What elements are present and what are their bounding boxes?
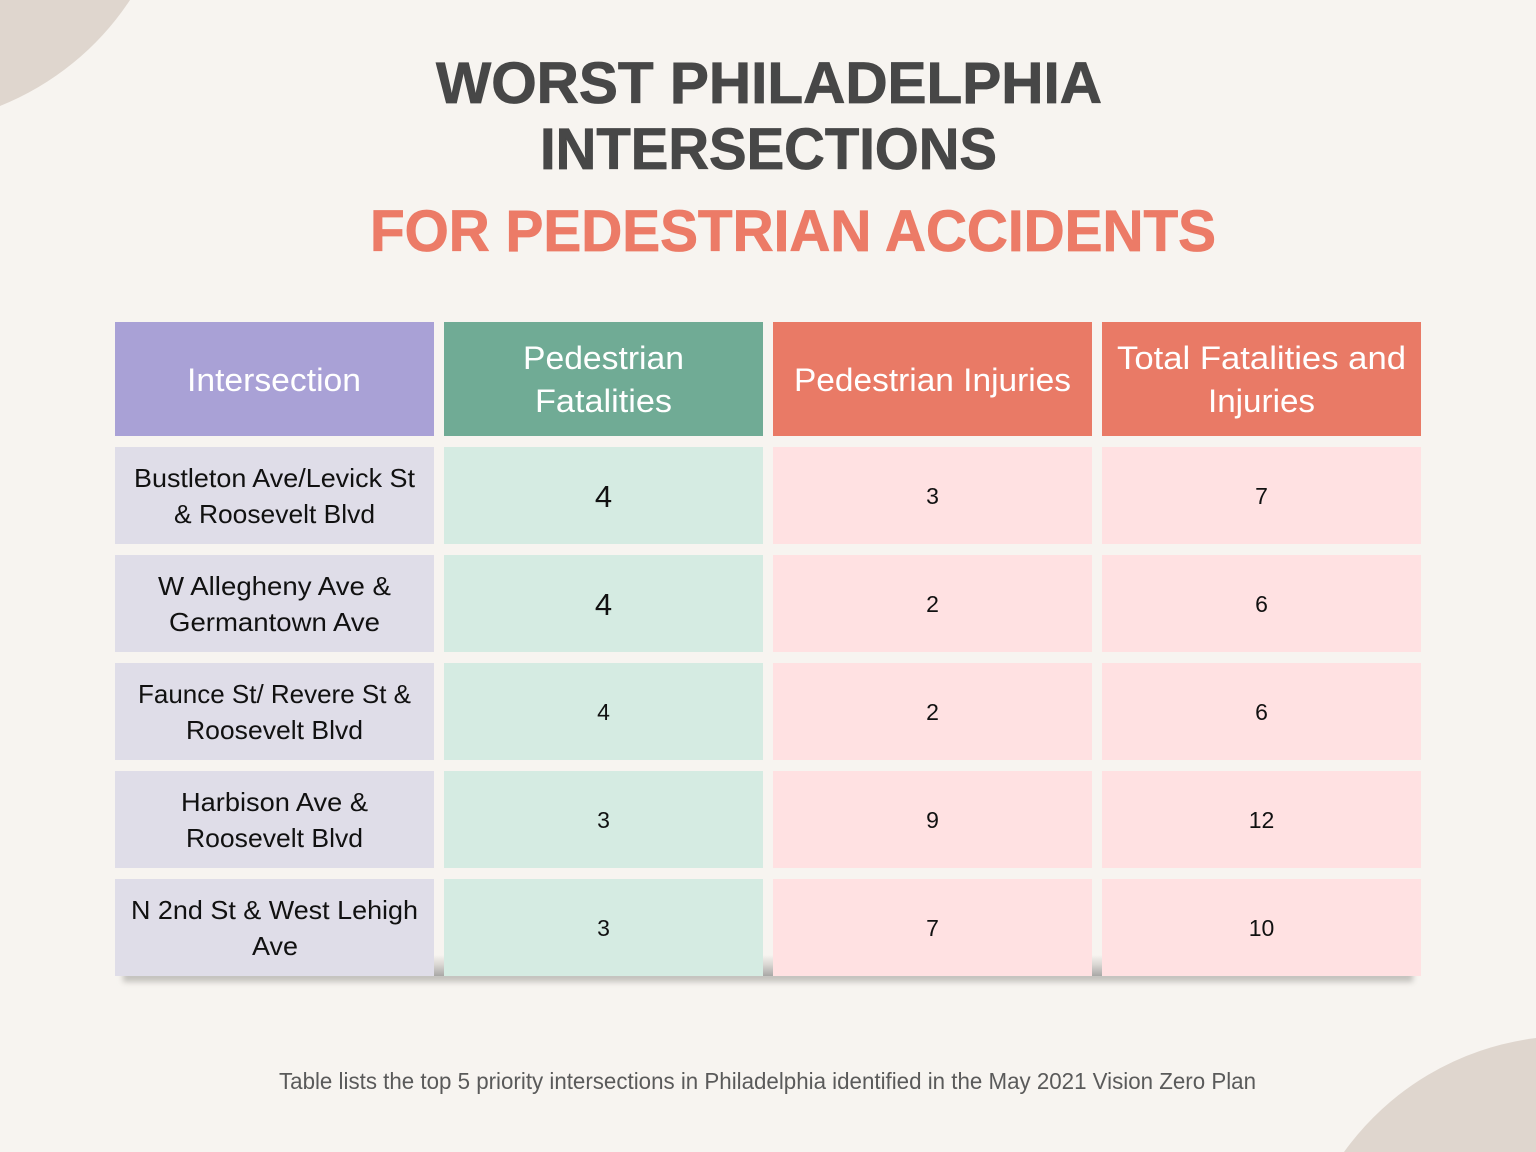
header: Total Fatalities and Injuries: Injuries <box>1208 383 1315 419</box>
decorative corner shape: top left <box>0 0 130 106</box>
title line 2: INTERSECTIONS <box>540 117 997 182</box>
header: Intersection <box>115 322 434 436</box>
row 4: Harbison Ave & <box>181 787 368 817</box>
row 2: 4 <box>595 587 612 622</box>
row 4: 12 <box>1249 807 1274 833</box>
header: Pedestrian Injuries: Pedestrian Injuries <box>794 362 1071 398</box>
row 4: Roosevelt Blvd <box>186 823 363 853</box>
row 2: W Allegheny Ave & <box>158 571 391 601</box>
row 3 <box>115 663 1421 760</box>
row 1: Bustleton Ave/Levick St <box>134 463 416 493</box>
header: Intersection: Intersection <box>187 362 361 398</box>
header row <box>115 322 1421 436</box>
header: Pedestrian Fatalities: Fatalities <box>535 383 672 419</box>
row 4: 3 <box>597 807 610 833</box>
row 4: 9 <box>926 807 939 833</box>
header: Pedestrian Fatalities <box>444 322 763 436</box>
title line 1: WORST PHILADELPHIA <box>436 51 1102 116</box>
row 3: Faunce St/ Revere St & <box>138 679 411 709</box>
table shadow <box>123 955 1413 982</box>
row 4 <box>115 771 1421 868</box>
title line 3: subtitle in coral: FOR PEDESTRIAN ACCIDENTS <box>370 199 1216 264</box>
row 3: 6 <box>1255 699 1268 725</box>
row 1: 4 <box>595 479 612 514</box>
row 1: 3 <box>926 483 939 509</box>
header: Total Fatalities and Injuries: Total Fatalities and <box>1117 340 1406 376</box>
row 1: 7 <box>1255 483 1268 509</box>
footnote: Table lists the top 5 priority intersections in Philadelphia identified in the May 2021 Vision Zero Plan <box>279 1068 1256 1094</box>
row 2 <box>115 555 1421 652</box>
row 3: 4 <box>597 699 610 725</box>
row 1 <box>115 447 1421 544</box>
row 2: Germantown Ave <box>169 607 380 637</box>
row 5: N 2nd St & West Lehigh <box>131 895 418 925</box>
row 5: 10 <box>1249 915 1274 941</box>
row 3: 2 <box>926 699 939 725</box>
row 2: 2 <box>926 591 939 617</box>
table <box>115 322 1421 982</box>
title <box>370 51 1216 264</box>
decorative corner shape: bottom right <box>1344 1038 1536 1152</box>
row 5: Ave <box>252 931 298 961</box>
header: Pedestrian Injuries <box>773 322 1092 436</box>
row 1: & Roosevelt Blvd <box>174 499 375 529</box>
row 2: 6 <box>1255 591 1268 617</box>
row 5 <box>115 879 1421 976</box>
header: Pedestrian Fatalities: Pedestrian <box>523 340 684 376</box>
header: Total Fatalities and Injuries <box>1102 322 1421 436</box>
row 5: 7 <box>926 915 939 941</box>
row 5: 3 <box>597 915 610 941</box>
row 3: Roosevelt Blvd <box>186 715 363 745</box>
